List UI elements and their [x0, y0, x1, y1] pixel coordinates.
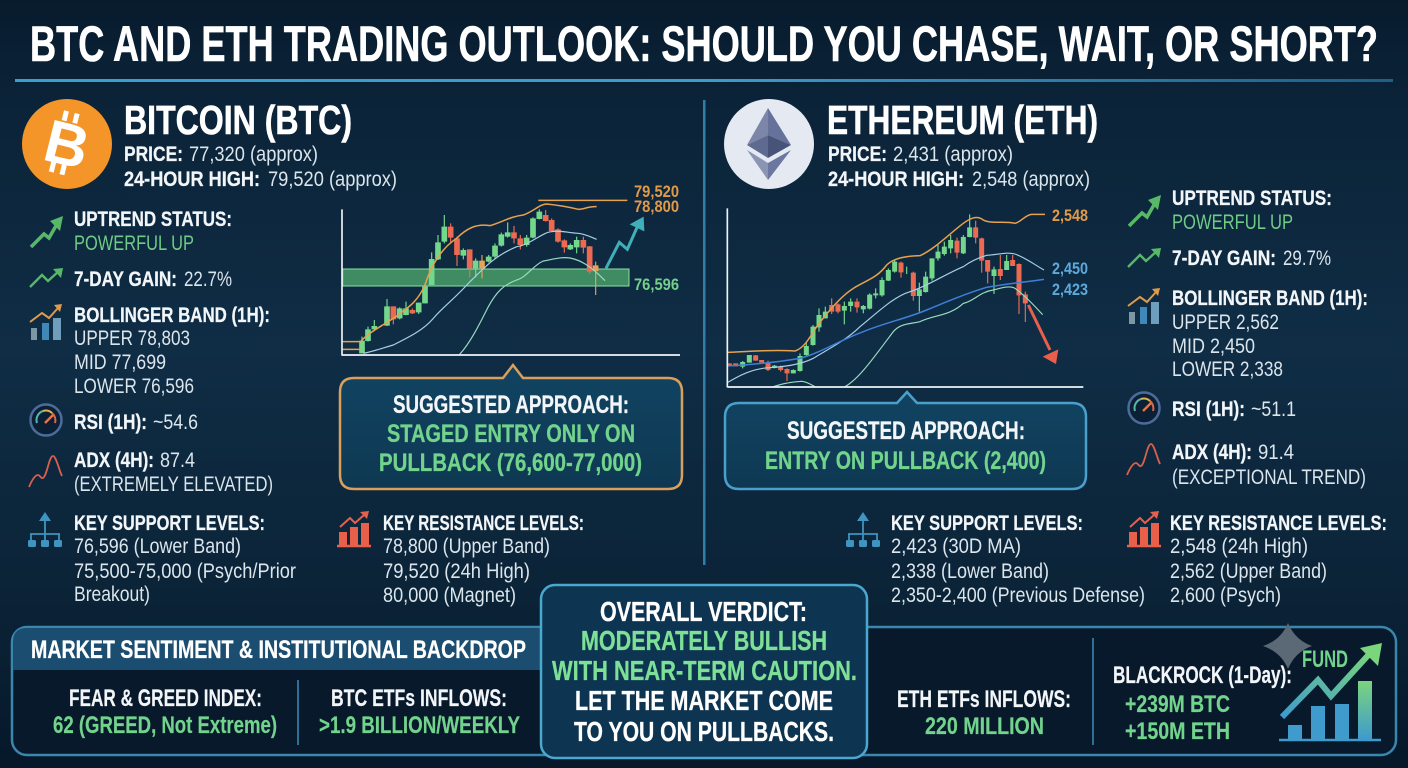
text: eth key resistance levels	[1170, 512, 1387, 607]
text: eth rsi: RSI (1H):	[1172, 398, 1245, 421]
text: btc key resistance levels	[383, 512, 584, 607]
text: btc adx: 87.4	[160, 449, 195, 472]
icon: resistance bars	[1127, 511, 1161, 546]
icon: adx line	[29, 456, 62, 487]
callout: btc suggested approach	[340, 365, 682, 489]
icon: bollinger bars	[30, 304, 62, 340]
chart: btc candlesticks: 79,520	[634, 182, 679, 201]
icon: resistance bars	[337, 511, 371, 546]
text: eth key resistance levels: 2,600 (Psych)	[1170, 584, 1281, 607]
text: eth uptrend status: UPTREND STATUS:	[1172, 187, 1332, 210]
text: btc key resistance levels: 80,000 (Magnet)	[383, 584, 516, 607]
callout: btc suggested approach: PULLBACK (76,600-77,000)	[379, 449, 642, 477]
text: btc key support levels: KEY SUPPORT LEVELS:	[74, 512, 265, 535]
chart: eth candlesticks: 2,450	[1052, 259, 1088, 278]
icon: uptrend arrow	[31, 216, 63, 247]
text: btc adx: (EXTREMELY ELEVATED)	[74, 473, 273, 496]
text: btc price: PRICE:	[124, 143, 183, 166]
callout: overall verdict: TO YOU ON PULLBACKS.	[574, 716, 834, 747]
text: btc key resistance levels: 79,520 (24h High)	[383, 560, 530, 583]
text: btc key resistance levels: 78,800 (Upper Band)	[383, 535, 550, 558]
icon: fund growth chart	[1279, 643, 1382, 740]
text: eth 7-day gain: 7-DAY GAIN:	[1172, 247, 1276, 270]
metric: eth etf inflows: 220 MILLION	[925, 713, 1044, 740]
text: btc price: 79,520 (approx)	[268, 168, 397, 191]
metric: blackrock one-day flows: +239M BTC	[1125, 691, 1230, 718]
metric: fear and greed index	[53, 685, 277, 739]
text: eth price: 2,548 (approx)	[972, 168, 1090, 191]
text: eth 7-day gain: 29.7%	[1283, 247, 1331, 270]
icon: ethereum logo	[724, 99, 814, 189]
callout: btc suggested approach: SUGGESTED APPROACH:	[393, 391, 629, 419]
text: btc adx	[74, 449, 273, 496]
text: btc key support levels	[74, 512, 296, 606]
icon: bitcoin coin: B	[38, 107, 96, 182]
icon: gain arrow	[30, 268, 63, 287]
text: eth key resistance levels: 2,562 (Upper Band)	[1170, 560, 1327, 583]
callout: eth suggested approach: ENTRY ON PULLBACK (2,400)	[765, 447, 1046, 475]
callout: overall verdict	[541, 585, 867, 758]
text: btc price	[124, 143, 397, 191]
metric: eth etf inflows	[897, 686, 1071, 740]
text: eth key support levels	[891, 512, 1145, 607]
metric: btc etf inflows	[319, 685, 520, 739]
metric: fear and greed index: 62 (GREED, Not Extreme)	[53, 712, 277, 739]
chart: btc candlesticks: 78,800	[634, 197, 679, 216]
metric: btc etf inflows: >1.9 BILLION/WEEKLY	[319, 712, 520, 739]
text: btc rsi: RSI (1H):	[74, 411, 147, 434]
chart: eth candlesticks	[727, 206, 1088, 387]
icon: rsi gauge	[30, 404, 62, 436]
icon: sparkle star	[1263, 623, 1312, 669]
icon: uptrend arrow	[1129, 195, 1161, 226]
text: btc 7-day gain: 22.7%	[184, 268, 232, 291]
text: eth key support levels: 2,423 (30D MA)	[891, 535, 1021, 558]
chart: eth candlesticks: 2,548	[1052, 206, 1088, 225]
text: eth price: 2,431 (approx)	[893, 143, 1013, 166]
metric: blackrock one-day flows: +150M ETH	[1125, 718, 1230, 745]
text: btc key support levels: 75,500-75,000 (Psych/Prior	[74, 560, 296, 583]
callout: overall verdict: MODERATELY BULLISH	[581, 625, 827, 656]
text: btc bollinger band: MID 77,699	[74, 351, 166, 374]
icon: bitcoin coin	[22, 99, 112, 189]
callout: overall verdict: WITH NEAR-TERM CAUTION.	[552, 655, 857, 686]
text: btc bollinger band: UPPER 78,803	[74, 327, 190, 350]
icon: rsi gauge	[1128, 392, 1160, 424]
callout: eth suggested approach: SUGGESTED APPROACH:	[787, 417, 1025, 445]
text: btc bollinger band: LOWER 76,596	[74, 375, 194, 398]
callout: overall verdict: LET THE MARKET COME	[575, 685, 833, 716]
callout: overall verdict: OVERALL VERDICT:	[600, 596, 807, 627]
chart: btc candlesticks	[342, 182, 680, 356]
text: eth uptrend status: POWERFUL UP	[1172, 211, 1293, 234]
heading: bitcoin: BITCOIN (BTC)	[124, 97, 352, 143]
text: eth bollinger band	[1172, 287, 1368, 381]
text: eth adx: (EXCEPTIONAL TREND)	[1172, 466, 1366, 489]
text: eth key support levels: KEY SUPPORT LEVELS:	[891, 512, 1083, 535]
panel: bitcoin	[22, 97, 682, 607]
text: eth adx: 91.4	[1258, 441, 1294, 464]
text: btc rsi: ~54.6	[153, 411, 198, 434]
text: eth adx: ADX (4H):	[1172, 441, 1252, 464]
text: eth rsi: ~51.1	[1251, 398, 1296, 421]
text: btc uptrend status: POWERFUL UP	[74, 232, 194, 255]
text: eth key resistance levels: 2,548 (24h High)	[1170, 535, 1308, 558]
text: eth bollinger band: MID 2,450	[1172, 335, 1255, 358]
text: btc uptrend status	[74, 208, 232, 255]
panel: market sentiment and institutional backdrop	[12, 585, 1396, 758]
metric: blackrock one-day flows: BLACKROCK (1-Day):	[1113, 662, 1292, 689]
panel: ethereum	[724, 97, 1387, 607]
metric: eth etf inflows: ETH ETFs INFLOWS:	[897, 686, 1071, 713]
text: eth key support levels: 2,338 (Lower Band)	[891, 560, 1049, 583]
text: eth price: PRICE:	[828, 143, 887, 166]
text: btc bollinger band: BOLLINGER BAND (1H):	[74, 304, 270, 327]
text: eth uptrend status	[1172, 187, 1332, 234]
icon: support network	[846, 512, 880, 547]
text: eth adx	[1172, 441, 1366, 489]
text: btc price: 77,320 (approx)	[189, 143, 318, 166]
heading: market sentiment: MARKET SENTIMENT & INSTITUTIONAL BACKDROP	[31, 636, 526, 664]
text: btc price: 24-HOUR HIGH:	[124, 168, 260, 191]
chart: btc candlesticks: 76,596	[634, 275, 679, 294]
heading: ethereum: ETHEREUM (ETH)	[827, 97, 1098, 143]
icon: gain arrow	[1128, 248, 1161, 267]
text: btc key resistance levels: KEY RESISTANCE LEVELS:	[383, 512, 584, 535]
metric: fear and greed index: FEAR & GREED INDEX:	[69, 685, 262, 712]
text: eth bollinger band: UPPER 2,562	[1172, 311, 1279, 334]
text: btc uptrend status: UPTREND STATUS:	[74, 208, 232, 231]
metric: blackrock one-day flows	[1113, 662, 1292, 745]
chart: eth candlesticks: 2,423	[1052, 280, 1088, 299]
icon: support network	[28, 512, 62, 547]
text: btc key support levels: Breakout)	[74, 583, 150, 606]
text: eth bollinger band: LOWER 2,338	[1172, 358, 1283, 381]
callout: btc suggested approach: STAGED ENTRY ONLY ON	[387, 420, 635, 448]
text: btc adx: ADX (4H):	[74, 449, 154, 472]
text: eth price: 24-HOUR HIGH:	[828, 168, 964, 191]
text: eth price	[828, 143, 1090, 191]
icon: adx line	[1127, 444, 1160, 475]
text: btc key support levels: 76,596 (Lower Band)	[74, 535, 241, 558]
icon: bollinger bars	[1128, 288, 1160, 324]
metric: btc etf inflows: BTC ETFs INFLOWS:	[331, 685, 507, 712]
callout: eth suggested approach	[725, 392, 1086, 489]
text: eth key support levels: 2,350-2,400 (Previous Defense)	[891, 584, 1145, 607]
text: btc 7-day gain: 7-DAY GAIN:	[74, 268, 177, 291]
icon: fund growth chart: FUND	[1302, 646, 1348, 673]
text: btc bollinger band	[74, 304, 270, 398]
